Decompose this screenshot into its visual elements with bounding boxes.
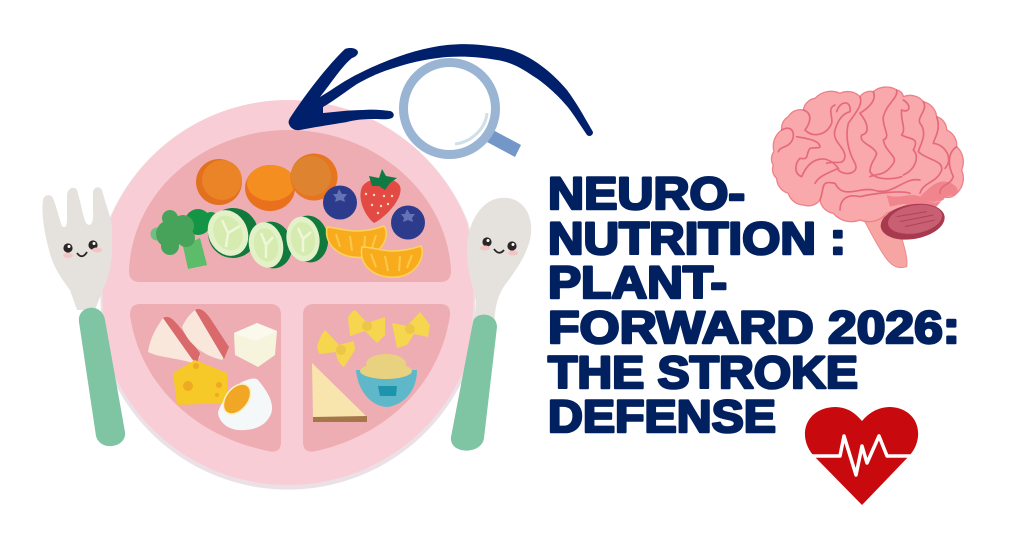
title — [548, 168, 960, 442]
title: THE STROKE — [548, 347, 858, 398]
arrow — [289, 44, 593, 136]
icon: brain — [771, 87, 963, 268]
plate compartment: bottom left — [130, 304, 281, 452]
food: mandarin slices — [327, 226, 422, 277]
food: tofu cube — [234, 323, 277, 367]
food: farfalle pasta — [317, 310, 430, 367]
food: egg — [218, 378, 272, 430]
food: toast — [312, 363, 367, 422]
title: NEURO- — [548, 168, 745, 219]
food: bowl of grains — [356, 354, 417, 407]
food: blueberries — [323, 186, 425, 240]
title: FORWARD 2026: — [548, 302, 960, 353]
icon: spoon — [451, 198, 531, 451]
food: fish slices — [148, 309, 229, 364]
icon: magnifying glass — [404, 62, 521, 157]
food: cheese — [173, 360, 227, 405]
title: PLANT- — [548, 257, 727, 308]
icon: fork — [42, 187, 125, 446]
food: cucumbers — [200, 200, 331, 272]
title: NUTRITION : — [548, 213, 846, 264]
plate compartment: top — [129, 130, 451, 282]
plate — [100, 100, 476, 490]
food: strawberry — [360, 169, 401, 223]
title: DEFENSE — [548, 391, 776, 442]
food: carrots — [196, 154, 338, 211]
food: broccoli — [150, 209, 219, 269]
icon: heart with pulse — [805, 407, 918, 505]
plate compartment: bottom right — [303, 304, 450, 452]
